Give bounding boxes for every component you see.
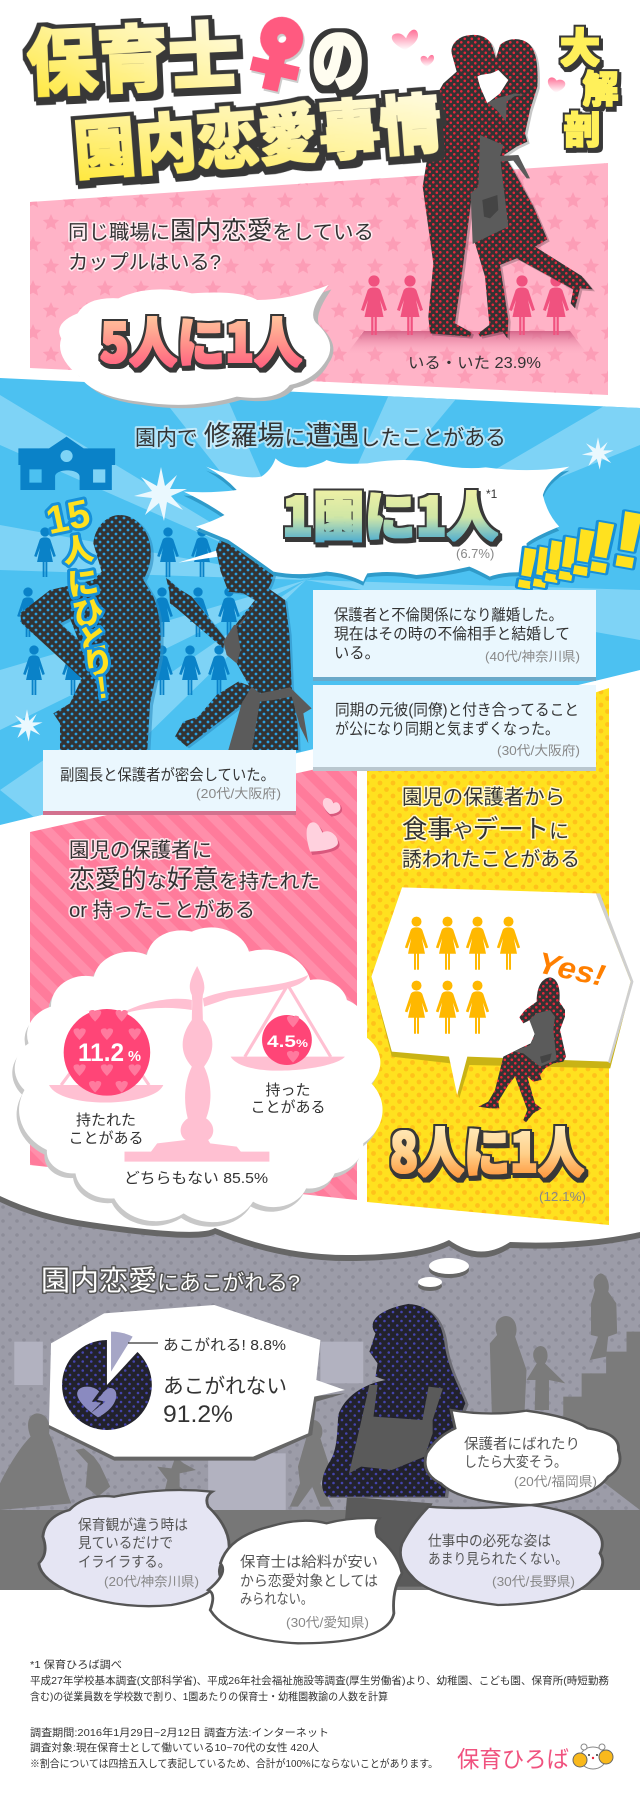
title: 保育士の園内恋愛事情 [24,0,444,193]
text: footnotes: *1 保育ひろば調べ [30,1658,122,1671]
text: 15人にひとり!: ひ [70,594,106,633]
text: exclamation marks: ! [508,534,547,603]
heading: 食事やデート: 誘われたことがある [402,848,580,871]
illustration: right woman pointing silhouette [166,523,312,752]
title: 保育士の園内恋愛事情: 保育士 [24,0,241,111]
card: 40代 神奈川県: (40代/神奈川県) [485,649,580,664]
text: exclamation marks: ! [578,506,627,591]
label: いる・いた 23.9%: いる・いた 23.9% [408,354,541,372]
text: exclamation marks: ! [547,522,590,596]
card: 20代 大阪府: (20代/大阪府) [196,786,281,801]
text: comment 愛知県 [240,1554,378,1630]
bubbles: shapes of comment clouds [39,1410,620,1643]
heading: 大解剖: 大 [560,16,600,74]
label: 持ったことがある [250,1082,326,1116]
panel: yellow dotted panel [367,688,609,1225]
label: 12.1%: (12.1%) [539,1189,586,1204]
text: 15人にひとり! [42,492,116,706]
text: 15人にひとり!: 人 [60,531,96,570]
text: comment 神奈川県: 保育観が違う時は [78,1517,188,1534]
text: question one: カップルはいる? [68,252,221,274]
callout: burst 1園に1人 [184,458,569,586]
callout: hexagon speech bubble [371,887,633,1098]
card: 40代 神奈川県: 現在はその時の不倫相手と結婚して [334,626,570,643]
callout: burst 1園に1人: 1園に1人 [282,473,498,552]
illustration: kissing couple silhouette [423,35,595,340]
icon: hearts near couple [392,30,565,93]
icon: bear mascot [573,1744,613,1769]
heading: 大解剖 [560,16,618,154]
panel: pink striped panel [30,760,357,1200]
text: exclamation marks: ! [561,513,607,592]
label: 持ったことがある: ことがある [250,1099,326,1116]
logo: 保育ひろば: 保育ひろば [457,1746,569,1772]
card: 30代 大阪府 [313,685,596,771]
title: 保育士の園内恋愛事情: 園内恋愛事情 [70,73,444,193]
icon: four pink women [361,275,569,335]
label: 持たれたことがある: ことがある [68,1130,144,1147]
text: footnotes: 含む)の従業員数を学校数で割り、1園あたりの保育士・幼稚園教諭の人数を計算 [30,1690,388,1703]
text: comment 愛知県: 保育士は給料が安い [240,1554,378,1571]
label: 持たれたことがある [68,1112,144,1147]
text: footnotes: 調査対象:現在保育士として働いている10~70代の女性 420人 [30,1741,320,1754]
card: 40代 神奈川県: いる。 [334,645,380,662]
text: question one [68,217,374,274]
icon: seven orange women [405,917,520,1034]
card: 20代 大阪府: 副園長と保護者が密会していた。 [60,767,275,784]
label: どちらもない 85.5%: どちらもない 85.5% [124,1170,268,1187]
callout: 5人に1人 cloud [59,285,333,408]
pie chart: 91.2 / 8.8 [62,1332,152,1430]
label: 持たれたことがある: 持たれた [76,1112,136,1129]
text: comment 愛知県: みられない。 [240,1591,313,1608]
heading: 食事やデート [402,786,580,871]
card: 30代 大阪府: (30代/大阪府) [497,743,580,758]
text: comment 福岡県: したら大変そう。 [464,1454,567,1471]
text: comment 福岡県: (20代/福岡県) [514,1474,597,1489]
text: comment 福岡県: 保護者にばれたり [464,1436,580,1453]
text: 15人にひとり!: り [80,644,116,683]
text: comment 神奈川県: イライラする。 [78,1554,171,1571]
heading: 園内恋愛にあこがれる?: 園内恋愛にあこがれる? [41,1265,300,1296]
label: 4.5%: 4.5 % [267,1032,308,1051]
text: footnotes: 調査期間:2016年1月29日~2月12日 調査方法:インターネット [30,1726,329,1739]
text: question one: 同じ職場に園内恋愛をしている [68,217,374,245]
callout: burst 1園に1人: (6.7%) [456,546,494,561]
title: 保育士の園内恋愛事情: の [312,6,364,105]
text: exclamation marks: ! [523,533,562,602]
heading: 大解剖: 解 [583,59,618,113]
card: 40代 神奈川県 [313,590,596,681]
icon: school building [18,437,115,490]
panel: pink star couple panel [30,163,608,395]
icon: pink hearts [307,798,342,855]
panel: blue sunburst section [0,370,640,830]
callout: white polygon with pie chart: 91.2% [163,1401,233,1428]
text: comment 神奈川県 [78,1517,199,1589]
text: exclamation marks [508,492,640,603]
heading: 食事やデート: 食事やデートに [402,816,569,844]
card: 40代 神奈川県: 保護者と不倫関係になり離婚した。 [334,607,563,624]
text: Yes!: Yes! [535,947,608,993]
card: 30代 大阪府: 同期の元彼(同僚)と付き合ってること [335,702,579,719]
callout: white polygon with pie chart [49,1305,345,1461]
text: comment 愛知県: (30代/愛知県) [286,1615,369,1630]
heading: 大解剖: 剖 [564,100,600,154]
text: footnotes [30,1658,609,1770]
text: comment 福岡県 [464,1436,597,1489]
heading: 恋愛的な好意: 恋愛的な好意を持たれた [69,866,320,894]
text: comment 神奈川県: 見ているだけで [78,1536,173,1552]
illustration: floor shadow [346,331,588,355]
text: comment 愛知県: から恋愛対象としては [240,1573,378,1590]
text: comment 長野県: あまり見られたくない。 [428,1551,568,1568]
callout: 5人に1人 cloud: 5人に1人 [100,299,302,378]
text: 8人に1人: 8人に1人 [390,1109,584,1188]
text: comment 長野県 [428,1533,575,1589]
illustration: left woman silhouette [20,515,164,752]
icon: blue crowd behind silhouettes [17,527,240,695]
heading: 食事やデート: 園児の保護者から [402,786,565,809]
label: 11.2%: 11.2 % [78,1039,141,1067]
callout: white polygon with pie chart: あこがれる! 8.8% [163,1337,286,1354]
card: 30代 大阪府: が公になり同期と気まずくなった。 [335,721,559,738]
heading: 修羅場: 園内で 修羅場に遭遇したことがある [135,421,506,451]
illustration: balance scale [49,966,345,1162]
card: 20代 大阪府 [43,750,296,815]
illustration: main woman silhouette [322,1304,469,1587]
text: footnotes: ※割合については四捨五入して表記しているため、合計が100%にならないことがあります。 [30,1757,438,1770]
text: footnotes: 平成27年学校基本調査(文部科学省)、平成26年社会福祉施設等調査(厚生労働省)より、幼稚園、こども園、保育所(時短勤務 [30,1674,609,1687]
text: 15人にひとり!: と [75,621,111,660]
heading: 恋愛的な好意: 園児の保護者に [69,839,212,862]
background: grey dotted section [0,1196,640,1590]
text: 15人にひとり!: 15 [42,492,94,543]
text: comment 神奈川県: (20代/神奈川県) [104,1574,199,1589]
callout: white polygon with pie chart: あこがれない [163,1375,287,1398]
text: 15人にひとり!: ! [95,669,110,706]
heading: 恋愛的な好意 [69,839,320,922]
panel: white cloud with scale [12,927,383,1227]
illustration: grey background scene [0,1273,640,1590]
text: comment 長野県: (30代/長野県) [492,1574,575,1589]
heading: 恋愛的な好意: or 持ったことがある [69,899,255,922]
decoration: thought bubbles [418,1258,469,1291]
text: exclamation marks: ! [534,527,575,598]
callout: burst 1園に1人: *1 [486,487,498,501]
text: comment 長野県: 仕事中の必死な姿は [428,1533,551,1550]
decoration: starbursts [11,437,614,742]
label: 持ったことがある: 持った [265,1082,311,1099]
illustration: seated woman silhouette [478,977,566,1122]
icon: female symbol [246,20,308,95]
text: 15人にひとり!: に [65,564,101,603]
